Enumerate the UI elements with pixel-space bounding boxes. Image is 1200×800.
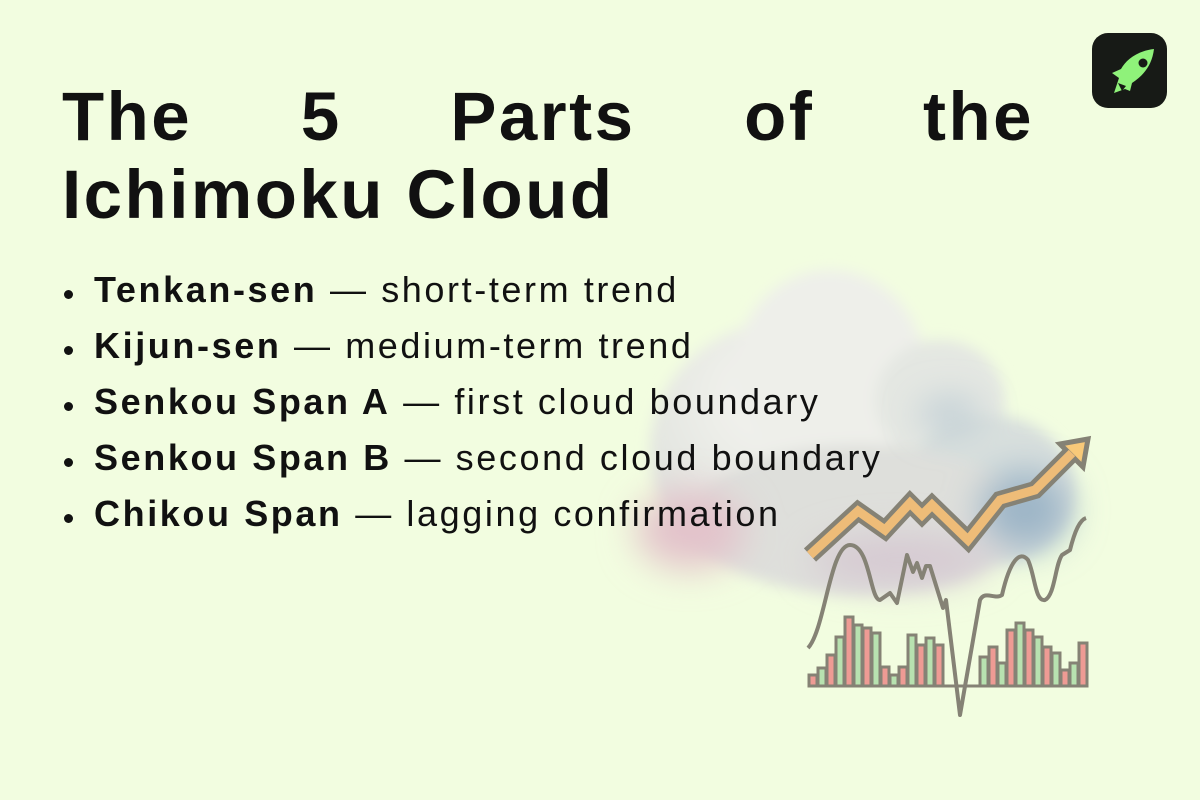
title: Ichimoku Cloud [62,156,614,233]
title: the [923,78,1034,155]
title: of [744,78,814,155]
title [62,78,1034,233]
bullet list: Senkou Span B — second cloud boundary [94,437,883,478]
trend arrow [810,439,1088,555]
title: The [62,78,192,155]
bar chart [808,617,1088,686]
bullet list: Chikou Span — lagging confirmation [94,493,781,534]
bullet list: Tenkan-sen — short-term trend [94,269,679,310]
price line [808,518,1086,715]
title: Parts [450,78,636,155]
cloud [635,270,1075,595]
bullet list [64,269,883,534]
title: 5 [301,78,342,155]
bullet list: Kijun-sen — medium-term trend [94,325,694,366]
icon: rocket logo [1092,33,1167,108]
bullet list: Senkou Span A — first cloud boundary [94,381,820,422]
